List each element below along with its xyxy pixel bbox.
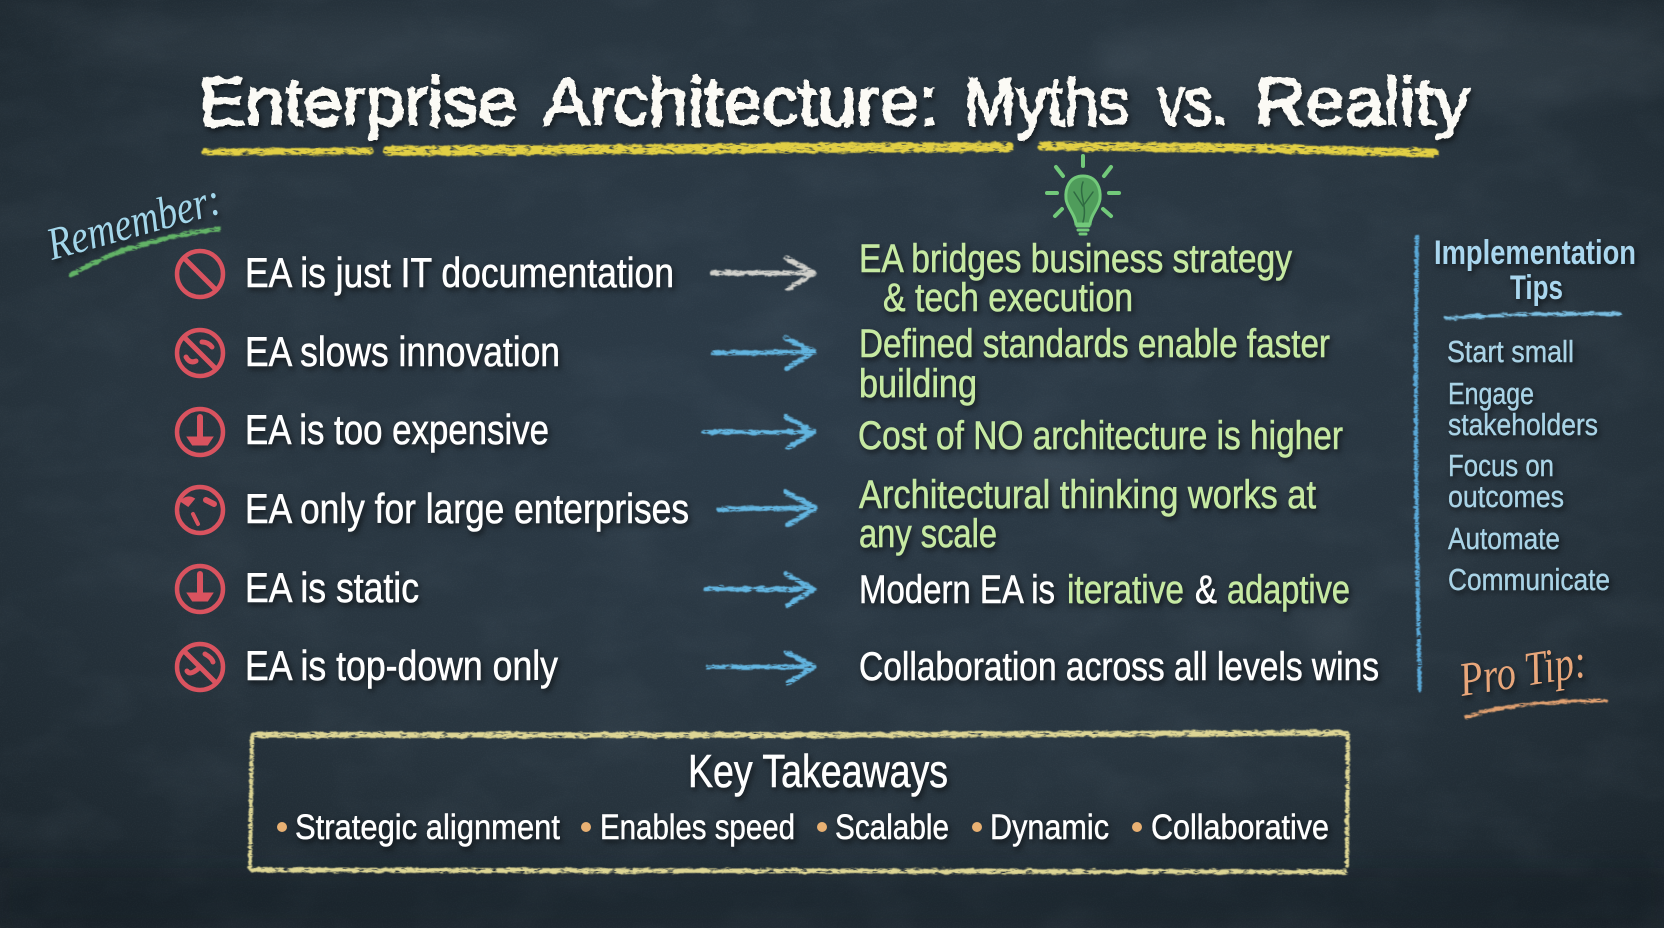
title: Enterprise (199, 64, 517, 140)
title: Reality (1255, 64, 1470, 140)
tips list: Start small (1447, 334, 1574, 369)
divider line (1416, 237, 1420, 690)
reality 4 (859, 473, 1316, 556)
takeaway items: Scalable (835, 808, 949, 847)
reality 5: Modern EA is (859, 568, 1055, 612)
icon: prohibition sign (177, 251, 223, 297)
icon: lightbulb (1047, 156, 1119, 234)
arrow 2 (713, 338, 814, 368)
myth 4: EA only for large enterprises (245, 485, 689, 532)
myths column (245, 249, 689, 689)
myth 5: EA is static (245, 564, 419, 611)
takeaway bullets (277, 822, 1142, 832)
myth 3: EA is too expensive (245, 406, 549, 453)
arrow 1 (713, 258, 814, 289)
title (199, 64, 1470, 140)
reality 5: adaptive (1227, 568, 1350, 612)
reality 4: any scale (859, 512, 997, 556)
reality 5: & (1195, 568, 1217, 612)
tips list: Focus on (1448, 448, 1554, 483)
tips list (1447, 334, 1610, 597)
arrow 5 (706, 574, 814, 605)
title underline (205, 146, 1434, 153)
Pro Tip underline (1466, 701, 1606, 717)
reality 1 (859, 237, 1292, 320)
reality 2 (859, 322, 1330, 406)
tips list: Engage (1448, 376, 1534, 411)
arrow 3 (704, 417, 814, 448)
takeaway items: Collaborative (1151, 808, 1329, 847)
Remember note (40, 173, 226, 275)
title: Architecture: (543, 64, 939, 140)
reality column (858, 237, 1379, 689)
Remember label: Remember: (40, 173, 226, 270)
takeaways chalk frame (250, 733, 1348, 872)
title: Myths (964, 64, 1130, 140)
icon: top-down prohibition (177, 644, 223, 690)
reality 6: Collaboration across all levels wins (859, 645, 1379, 689)
reality 3: Cost of NO architecture is higher (858, 414, 1343, 458)
reality 5: iterative (1067, 568, 1184, 612)
icon: slow prohibition (177, 330, 223, 376)
tips heading (1434, 234, 1636, 307)
tips list: Automate (1448, 521, 1560, 556)
tips list: Communicate (1448, 562, 1610, 597)
title: vs. (1157, 64, 1228, 140)
reality 2: building (859, 362, 977, 406)
arrows (704, 258, 816, 683)
panel: key takeaways (250, 733, 1348, 872)
arrow 4 (719, 492, 816, 525)
Remember underline (71, 229, 219, 275)
tips list: outcomes (1448, 479, 1564, 514)
panel: implementation tips (1434, 234, 1636, 597)
Pro Tip note (1455, 634, 1606, 717)
takeaway items: Strategic alignment (295, 808, 560, 847)
myth 1: EA is just IT documentation (245, 249, 674, 296)
tips heading underline (1446, 314, 1620, 318)
takeaways heading: Key Takeaways (688, 745, 948, 797)
takeaway items: Dynamic (990, 808, 1109, 847)
arrow 6 (708, 652, 814, 683)
icon: static down marker (177, 566, 223, 612)
reality 2: Defined standards enable faster (859, 322, 1330, 366)
reality 1: EA bridges business strategy (859, 237, 1292, 281)
tips list: stakeholders (1448, 407, 1598, 442)
tips heading: Tips (1510, 269, 1563, 307)
takeaway items: Enables speed (600, 808, 795, 847)
icon: globe (177, 487, 223, 533)
reality 4: Architectural thinking works at (859, 473, 1316, 517)
reality 1: & tech execution (883, 276, 1133, 320)
icon: expensive down marker (177, 409, 223, 455)
myth 6: EA is top-down only (245, 642, 558, 689)
Pro Tip label: Pro Tip: (1455, 634, 1590, 707)
reality 5 (859, 568, 1350, 612)
myth icons (177, 251, 223, 690)
myth 2: EA slows innovation (245, 328, 560, 375)
takeaway items (295, 808, 1329, 847)
